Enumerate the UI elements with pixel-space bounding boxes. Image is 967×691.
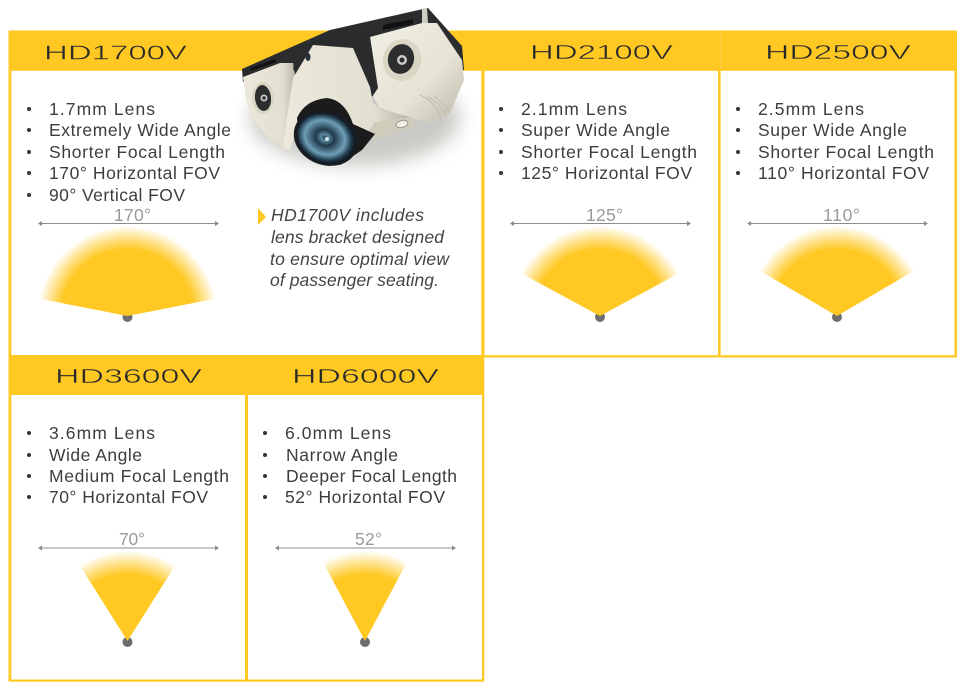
panel: HD3600V [8,355,248,682]
spec list: HD2100V: 125° Horizontal FOV [521,163,692,183]
heading: HD6000V: HD6000V [292,365,440,388]
callout: lens bracket note: of passenger seating. [270,270,439,290]
spec list: HD2500V [736,99,934,183]
spec list: HD2100V: Super Wide Angle [521,120,670,140]
callout: lens bracket note: lens bracket designed [271,227,445,247]
spec list: HD6000V: 52° Horizontal FOV [285,487,445,507]
field of view diagram: 170 degrees: 170° [114,205,151,225]
spec list: HD1700V: 90° Vertical FOV [49,185,185,205]
spec list: HD3600V: Wide Angle [49,445,142,465]
spec list: HD2100V: 2.1mm Lens [521,99,627,119]
field of view diagram: 52 degrees [275,529,456,647]
spec list: HD6000V: Narrow Angle [286,445,398,465]
panel: HD6000V [248,355,484,682]
spec list: HD6000V [263,423,457,507]
field of view diagram: 170 degrees [38,205,219,322]
panel: HD2100V [484,30,721,358]
spec list: HD1700V: 1.7mm Lens [49,99,155,119]
field of view diagram: 110 degrees: 110° [823,205,860,225]
spec list: HD6000V: Deeper Focal Length [286,466,457,486]
spec list: HD1700V: Shorter Focal Length [49,142,225,162]
spec list: HD1700V: Extremely Wide Angle [49,120,231,140]
spec list: HD2100V [499,99,697,183]
callout: lens bracket note: to ensure optimal view [270,249,450,269]
heading: HD2100V: HD2100V [530,41,674,64]
spec list: HD3600V: 3.6mm Lens [49,423,155,443]
spec list: HD1700V: 170° Horizontal FOV [49,163,220,183]
spec list: HD3600V: Medium Focal Length [49,466,229,486]
heading: HD3600V: HD3600V [55,365,203,388]
callout: lens bracket note [258,205,450,290]
spec list: HD2500V: 110° Horizontal FOV [758,163,929,183]
spec list: HD2500V: 2.5mm Lens [758,99,864,119]
spec list: HD2100V: Shorter Focal Length [521,142,697,162]
spec list: HD6000V: 6.0mm Lens [285,423,391,443]
field of view diagram: 125 degrees [510,205,691,322]
field of view diagram: 70 degrees [38,529,219,647]
spec list: HD2500V: Shorter Focal Length [758,142,934,162]
camera illustration [242,8,464,175]
field of view diagram: 110 degrees [747,205,928,322]
field of view diagram: 70 degrees: 70° [119,529,145,549]
heading: HD2500V: HD2500V [765,41,912,64]
heading: HD1700V: HD1700V [44,42,188,64]
spec list: HD3600V: 70° Horizontal FOV [49,487,208,507]
callout: lens bracket note: HD1700V includes [271,205,424,225]
panel: HD2500V [721,30,957,358]
spec list: HD1700V [27,99,231,205]
field of view diagram: 125 degrees: 125° [586,205,623,225]
spec list: HD2500V: Super Wide Angle [758,120,907,140]
panel: HD1700V [8,30,484,358]
field of view diagram: 52 degrees: 52° [355,529,382,549]
spec list: HD3600V [27,423,229,507]
